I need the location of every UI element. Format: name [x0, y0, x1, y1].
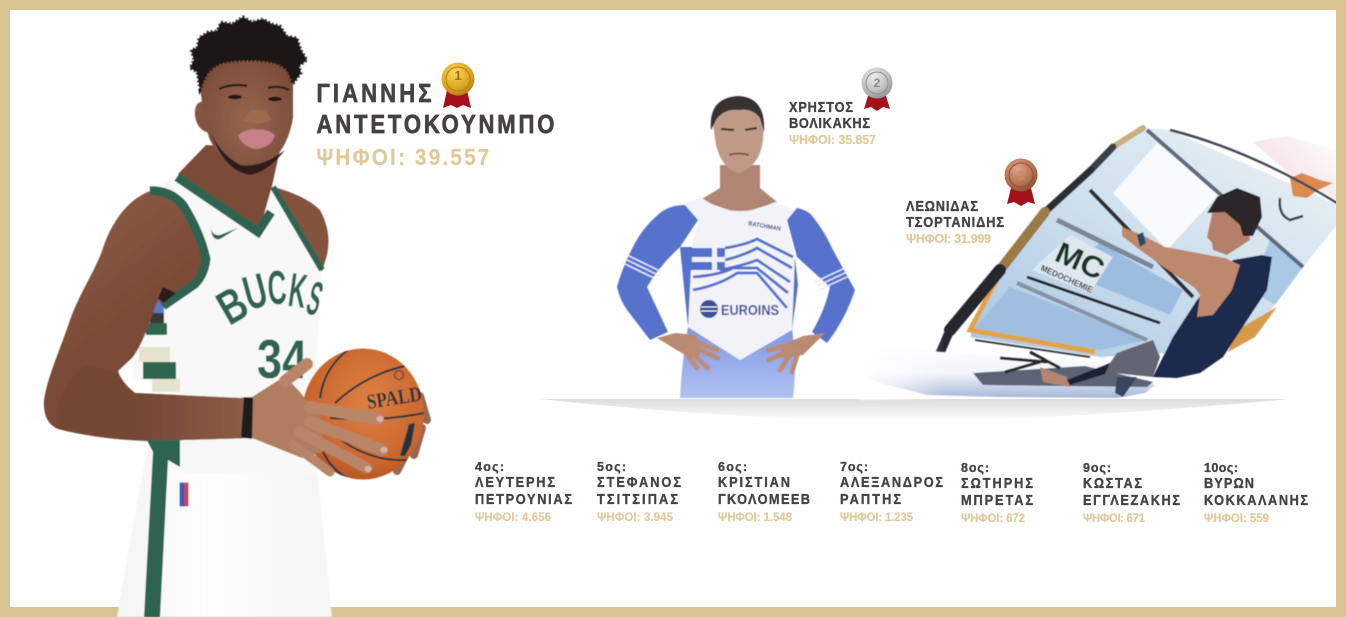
torso blue sides	[680, 247, 798, 330]
side panel of shorts	[144, 440, 180, 617]
ball logo: SPALDING	[365, 376, 456, 414]
boom and battens	[1017, 130, 1337, 340]
hair	[1207, 188, 1262, 236]
icon: silver medal: 2	[874, 76, 881, 90]
NBA logo	[180, 482, 188, 506]
sail white window	[1113, 143, 1220, 250]
right strap trim	[273, 187, 322, 270]
ranking: 10th place: ΨΗΦΟΙ: 559	[1204, 513, 1269, 525]
jersey lettering	[208, 261, 328, 335]
orange harness panel	[1228, 307, 1277, 352]
icon: gold medal	[442, 62, 474, 108]
armpit	[158, 287, 176, 303]
icon: bronze medal	[1004, 158, 1038, 206]
sail tint panels	[1253, 136, 1337, 200]
ranking: 8th place: 8ος:	[961, 461, 989, 475]
leg	[1106, 340, 1161, 378]
neck	[178, 145, 280, 238]
jersey lettering: S	[302, 271, 328, 326]
eyes	[228, 95, 242, 99]
jersey lettering: C	[266, 261, 288, 316]
board	[860, 340, 1155, 400]
orange foot of sail	[970, 268, 1095, 352]
ranking: 10th place	[1204, 461, 1308, 525]
right hand	[768, 333, 825, 372]
left hand	[657, 333, 718, 368]
chest sponsor: BATCHMAN	[748, 221, 781, 233]
ranking: 8th place: ΣΩΤΗΡΗΣ	[961, 474, 1033, 491]
right sleeve	[787, 208, 855, 343]
sailor	[1040, 188, 1272, 397]
name: Giannis: ΓΙΑΝΝΗΣ	[316, 79, 432, 108]
ranking: 8th place: ΜΠΡΕΤΑΣ	[961, 491, 1033, 508]
jersey lettering: K	[285, 264, 310, 319]
rear foot	[1040, 367, 1070, 387]
lips	[238, 129, 275, 149]
sail logo	[1032, 235, 1113, 295]
name block: third place: ΛΕΩΝΙΔΑΣ	[906, 197, 978, 214]
olive branch emblem	[1280, 198, 1303, 220]
ranking: 5th place: ΨΗΦΟΙ: 3.945	[597, 512, 674, 524]
ranking: 6th place: 6ος:	[718, 460, 747, 474]
ranking: 8th place	[961, 461, 1033, 525]
ranking: 10th place: 10ος:	[1204, 461, 1238, 475]
sail	[970, 128, 1337, 357]
left sleeve	[617, 205, 698, 340]
ranking: 5th place: 5ος:	[597, 460, 626, 474]
neck	[700, 165, 777, 214]
beard	[208, 122, 285, 175]
face	[1207, 205, 1250, 255]
jersey side stripes	[139, 299, 180, 392]
head	[711, 96, 764, 173]
jersey number: 34	[257, 328, 307, 390]
swoosh	[211, 228, 238, 239]
ranking: 4th place	[475, 460, 572, 524]
icon: bronze medal: 3	[1017, 168, 1025, 183]
jersey lettering: U	[237, 262, 273, 321]
ball	[303, 348, 424, 480]
ranking: 7th place: 7ος:	[840, 460, 868, 474]
ranking: 6th place: ΓΚΟΛΟΜΕΕΒ	[718, 490, 810, 507]
ranking: 9th place: 9ος:	[1083, 461, 1111, 475]
ranking: 4th place: 4ος:	[475, 460, 504, 474]
ranking: 9th place: ΚΩΣΤΑΣ	[1083, 474, 1142, 491]
ranking: 5th place	[597, 460, 681, 524]
sponsor logo	[700, 300, 779, 319]
icon: silver medal	[862, 68, 892, 111]
armhole trim	[150, 191, 206, 306]
front foot	[1115, 377, 1137, 397]
ranking: 4th place: ΨΗΦΟΙ: 4.656	[475, 512, 551, 524]
votes: first place: ΨΗΦΟΙ: 39.557	[316, 144, 489, 170]
hand	[252, 364, 388, 472]
upper arm and forearm	[44, 191, 253, 441]
icon: gold medal: 1	[454, 68, 462, 83]
jersey lettering: B	[208, 276, 257, 335]
name block: second place	[789, 98, 876, 147]
ranking: 5th place: ΤΣΙΤΣΙΠΑΣ	[597, 490, 678, 507]
ranking: 7th place	[840, 460, 943, 524]
mast	[940, 128, 1143, 353]
nose	[243, 110, 272, 124]
floor shadow	[540, 399, 1290, 421]
hair	[190, 17, 307, 90]
ranking: 4th place: ΠΕΤΡΟΥΝΙΑΣ	[475, 490, 572, 507]
athlete 1: Giannis Antetokounmpo photo illustration	[44, 17, 456, 617]
name block: second place: ΧΡΗΣΤΟΣ	[789, 98, 853, 115]
ranking: 9th place: ΕΓΓΛΕΖΑΚΗΣ	[1083, 491, 1180, 508]
title block: first place	[316, 79, 554, 170]
torso	[1153, 255, 1272, 378]
name block: second place: ΒΟΛΙΚΑΚΗΣ	[789, 114, 870, 131]
sponsor logo: EUROINS	[721, 302, 779, 319]
ranking: 5th place: ΣΤΕΦΑΝΟΣ	[597, 473, 681, 490]
athlete 3: Leonidas Tsortanidis windsurfer illustration	[860, 118, 1337, 400]
name block: second place: ΨΗΦΟΙ: 35.857	[789, 133, 876, 147]
name block: third place	[906, 197, 1004, 246]
ranking: 7th place: ΨΗΦΟΙ: 1.235	[840, 512, 914, 524]
forearm highlight	[57, 366, 253, 441]
shorts	[117, 448, 332, 617]
ranking: 9th place	[1083, 461, 1180, 525]
head	[190, 17, 307, 175]
neck trim	[177, 177, 271, 232]
ranking: 10th place: ΒΥΡΩΝ	[1204, 474, 1254, 491]
Greek flag on chest	[690, 239, 793, 308]
ranking: 9th place: ΨΗΦΟΙ: 671	[1083, 513, 1146, 525]
shorts	[680, 327, 795, 398]
sleeve stripes	[623, 255, 849, 290]
athlete 2: Christos Volikakis illustration	[617, 96, 855, 398]
jersey	[133, 176, 328, 473]
name block: third place: ΤΣΟΡΤΑΝΙΔΗΣ	[906, 213, 1004, 230]
watch	[1137, 232, 1146, 247]
ranking: 4th place: ΛΕΥΤΕΡΗΣ	[475, 473, 555, 490]
wristband	[241, 397, 253, 439]
eyebrows	[219, 85, 289, 90]
sail fade	[1206, 136, 1336, 204]
far shoulder	[270, 186, 328, 272]
ranking: 7th place: ΑΛΕΞΑΝΔΡΟΣ	[840, 473, 943, 490]
ranking: 7th place: ΡΑΠΤΗΣ	[840, 490, 901, 507]
finger nails	[376, 416, 384, 422]
ranking: 6th place: ΚΡΙΣΤΙΑΝ	[718, 473, 790, 490]
sail logo: MEDOCHEMIE	[1039, 263, 1095, 295]
ranking: 6th place	[718, 460, 810, 524]
arm and shoulder	[1122, 227, 1240, 317]
title block: first place: ΑΝΤΕΤΟΚΟΥΝΜΠΟ	[316, 110, 554, 139]
cyprus emblem	[1290, 173, 1333, 198]
ranking: 10th place: ΚΟΚΚΑΛΑΝΗΣ	[1204, 491, 1308, 508]
torso	[683, 198, 795, 360]
sail logo: MC	[1050, 236, 1109, 287]
ranking: 6th place: ΨΗΦΟΙ: 1.548	[718, 512, 793, 524]
name block: third place: ΨΗΦΟΙ: 31.999	[906, 232, 991, 246]
ranking: 8th place: ΨΗΦΟΙ: 672	[961, 513, 1025, 525]
fingers behind ball	[397, 396, 427, 471]
